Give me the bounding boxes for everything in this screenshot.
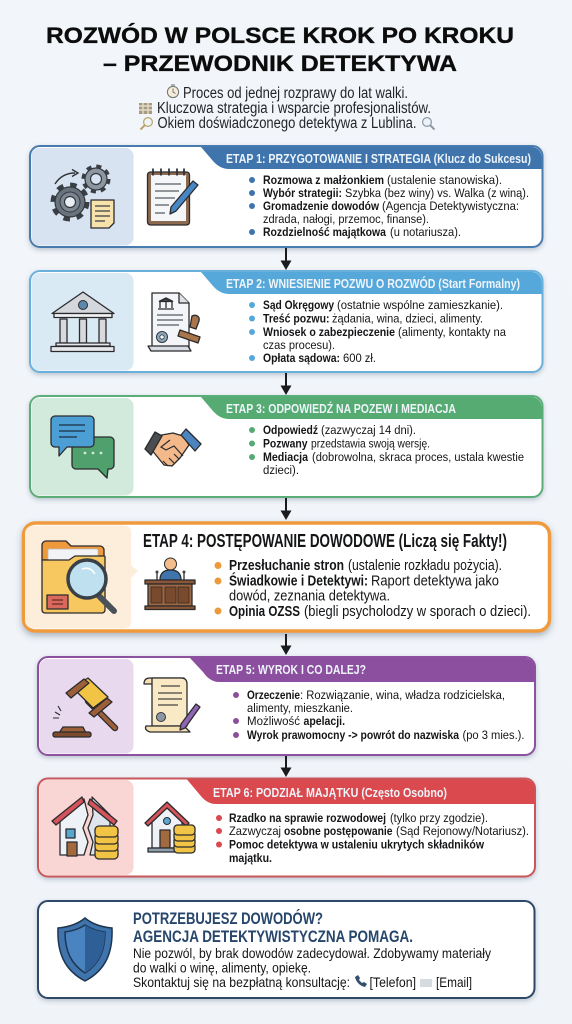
body text: call to action: [Email] <box>436 975 472 990</box>
intro text: Kluczowa strategia i wsparcie profesjonalistów. <box>157 100 431 117</box>
bullet list: etap 3: Mediacja <box>263 450 308 464</box>
bullet list: etap 5: alimenty, mieszkanie. <box>247 701 353 715</box>
icon: gavel <box>53 678 115 737</box>
icon: house and coins <box>145 802 195 853</box>
body text: call to action: Skontaktuj się na bezpłatną konsultację: <box>133 975 350 990</box>
bullet list: etap 1: (ustalenie stanowiska). <box>387 173 502 187</box>
bullet list: etap 2: Wniosek o zabezpieczenie <box>263 325 395 339</box>
bullet list: etap 6: Pomoc detektywa w ustaleniu ukrytych składników <box>229 838 484 852</box>
panel: etap 2 <box>30 271 542 372</box>
bullet list: etap 5: : Rozwiązanie, wina, władza rodzicielska, <box>300 688 505 702</box>
title: ROZWÓD W POLSCE KROK PO KROKU <box>46 23 514 48</box>
panel: etap 4 <box>24 523 550 631</box>
bullet list: etap 2: Opłata sądowa: <box>263 351 340 365</box>
header: etap 1 <box>201 147 542 169</box>
intro text: Proces od jednej rozprawy do lat walki. <box>183 85 408 102</box>
icon: court building <box>51 292 114 352</box>
header: etap 6 <box>187 780 534 804</box>
bullet list: etap 4: dowód, zeznania detektywa. <box>229 588 390 604</box>
arrow 4 to 5 <box>280 634 292 655</box>
icon: shield <box>58 918 112 981</box>
bullet list: etap 4: Raport detektywa jako <box>371 572 499 590</box>
bullet list: etap 2: (ostatnie wspólne zamieszkanie). <box>337 298 503 312</box>
icon: clipboard and pen <box>148 168 198 225</box>
icon: broken house and coins <box>52 797 118 859</box>
icon: handshake <box>145 429 201 466</box>
bullet list: etap 3: dzieci). <box>263 463 299 477</box>
icon: gears and note <box>53 166 114 228</box>
arrow 5 to 6 <box>280 756 292 777</box>
heading: call to action: AGENCJA DETEKTYWISTYCZNA POMAGA. <box>133 927 413 946</box>
bullet list: etap 6: Zazwyczaj <box>229 824 281 838</box>
bullet list: etap 6: (Sąd Rejonowy/Notariusz). <box>396 824 529 838</box>
body text: call to action: [Telefon] <box>370 975 416 990</box>
bullet list: etap 4: (ustalenie rozkładu pożycia). <box>348 557 502 574</box>
bullet list: etap 5: Wyrok prawomocny -> powrót do nazwiska <box>247 728 459 742</box>
header: etap 2 <box>201 272 542 294</box>
icon: folder with magnifier <box>42 541 114 613</box>
body text: call to action: do walki o winę, alimenty, opiekę. <box>133 960 311 976</box>
header: etap 5 <box>190 658 534 682</box>
panel: etap 1 <box>30 146 542 247</box>
header: etap 6: ETAP 6: PODZIAŁ MAJĄTKU (Często Osobno) <box>213 785 447 800</box>
bullet list: etap 5 <box>233 688 524 742</box>
bullet list: etap 6: (tylko przy zgodzie). <box>390 811 488 825</box>
bullet list: etap 3: przedstawia swoją wersję. <box>311 436 430 450</box>
panel: etap 3 <box>30 396 542 497</box>
bullet list: etap 1: (Agencja Detektywistyczna: <box>382 199 519 213</box>
bullet list: etap 1: Rozdzielność majątkowa <box>263 225 386 239</box>
bullet list: etap 6: majątku. <box>229 851 272 865</box>
bullet list: etap 6: osobne postępowanie <box>284 824 393 838</box>
bullet list: etap 4: Świadkowie i Detektywi: <box>229 572 368 590</box>
bullet list: etap 2: (alimenty, kontakty na <box>398 325 506 339</box>
bullet list: etap 4: (biegli psycholodzy w sporach o dzieci). <box>304 603 531 620</box>
header: etap 3: ETAP 3: ODPOWIEDŹ NA POZEW I MEDIACJA <box>226 401 456 416</box>
panel: etap 6 <box>38 778 535 876</box>
header: etap 2: ETAP 2: WNIESIENIE POZWU O ROZWÓD (Start Formalny) <box>226 276 520 291</box>
intro text: Okiem doświadczonego detektywa z Lublina. <box>158 115 416 132</box>
bullet list: etap 2: Treść pozwu: <box>263 312 330 326</box>
icon: speech bubbles <box>51 416 114 478</box>
title <box>46 23 514 76</box>
bullet list: etap 1: (u notariusza). <box>390 225 461 239</box>
bullet list: etap 1: zdrada, nałogi, przemoc, finanse). <box>263 212 429 226</box>
bullet list: etap 2 <box>249 298 506 365</box>
bullet list: etap 6: Rzadko na sprawie rozwodowej <box>229 811 386 825</box>
bullet list: etap 1: Gromadzenie dowodów <box>263 199 379 213</box>
bullet list: etap 2: czas procesu). <box>263 338 335 352</box>
bullet list: etap 5: apelacji. <box>304 714 345 728</box>
bullet list: etap 5: Orzeczenie <box>247 688 300 702</box>
bullet list: etap 1 <box>249 173 529 239</box>
header: etap 5: ETAP 5: WYROK I CO DALEJ? <box>216 662 366 677</box>
bullet list: etap 2: 600 zł. <box>343 351 376 365</box>
bullet list: etap 1: Wybór strategii: <box>263 186 342 200</box>
icon: lawsuit document with stamp <box>148 293 200 351</box>
heading: call to action: POTRZEBUJESZ DOWODÓW? <box>133 909 323 928</box>
bullet list: etap 1: Rozmowa z małżonkiem <box>263 173 384 187</box>
icon: scroll and pen <box>144 678 200 732</box>
bullet list: etap 4: Przesłuchanie stron <box>229 557 344 574</box>
bullet list: etap 5: (po 3 mies.). <box>462 728 524 742</box>
arrow 3 to 4 <box>280 498 292 520</box>
bullet list: etap 6 <box>216 811 529 865</box>
bullet list: etap 4: Opinia OZSS <box>229 603 300 620</box>
intro text <box>139 85 434 132</box>
panel: etap 5 <box>38 657 535 755</box>
bullet list: etap 2: żądania, wina, dzieci, alimenty. <box>332 312 483 326</box>
bullet list: etap 2: Sąd Okręgowy <box>263 298 334 312</box>
header: etap 3 <box>201 397 542 419</box>
body text: call to action <box>133 946 491 990</box>
icon: podium with speaker <box>145 558 195 610</box>
arrow 2 to 3 <box>280 373 292 395</box>
bullet list: etap 3 <box>249 423 524 477</box>
bullet list: etap 3: Odpowiedź <box>263 423 318 437</box>
arrow 1 to 2 <box>280 248 292 270</box>
panel: call to action <box>38 901 534 998</box>
title: – PRZEWODNIK DETEKTYWA <box>103 51 457 76</box>
bullet list: etap 4 <box>214 557 531 620</box>
bullet list: etap 3: (dobrowolna, skraca proces, ustala kwestie <box>312 450 524 464</box>
heading: call to action <box>133 909 413 946</box>
bullet list: etap 3: Pozwany <box>263 436 308 450</box>
bullet list: etap 3: (zazwyczaj 14 dni). <box>321 423 416 437</box>
body text: call to action: Nie pozwól, by brak dowodów zadecydował. Zdobywamy materiały <box>133 946 491 961</box>
bullet list: etap 1: Szybka (bez winy) vs. Walka (z winą). <box>345 186 529 200</box>
bullet list: etap 5: Możliwość <box>247 714 300 728</box>
